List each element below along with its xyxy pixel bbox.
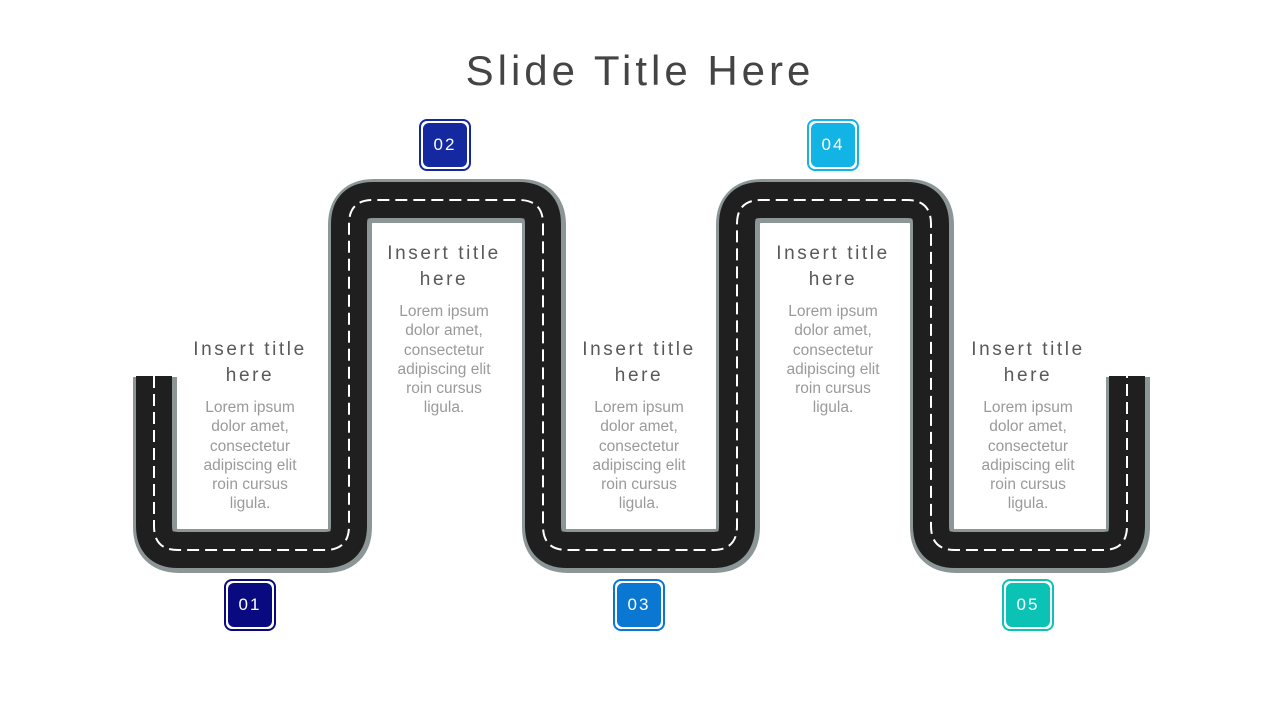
badge 05: 05 [1017, 595, 1039, 614]
text block 1: here [226, 365, 274, 386]
text block 4: ligula. [813, 399, 853, 416]
badge 02: 02 [434, 135, 456, 154]
text block 1: dolor amet, [211, 418, 289, 435]
text block 3 [582, 339, 696, 512]
text block 5: dolor amet, [989, 418, 1067, 435]
text block 4 [776, 243, 890, 416]
text block 1 [193, 339, 307, 512]
text block 2: Insert title [387, 243, 501, 264]
text block 2: roin cursus [406, 380, 482, 397]
text block 5: adipiscing elit [981, 457, 1075, 474]
text block 5: Lorem ipsum [983, 399, 1073, 416]
text block 2: here [420, 269, 468, 290]
badge 02 [419, 119, 471, 171]
text block 4: Insert title [776, 243, 890, 264]
text block 2: consectetur [404, 342, 484, 359]
text block 4: adipiscing elit [786, 361, 880, 378]
text block 4: Lorem ipsum [788, 303, 878, 320]
text block 3: Insert title [582, 339, 696, 360]
text block 1: roin cursus [212, 476, 288, 493]
text block 2: ligula. [424, 399, 464, 416]
text block 5 [971, 339, 1085, 512]
badge 03 [613, 579, 665, 631]
text block 5: Insert title [971, 339, 1085, 360]
text block 3: adipiscing elit [592, 457, 686, 474]
text block 1: consectetur [210, 438, 290, 455]
badge 04: 04 [822, 135, 844, 154]
text block 1: Insert title [193, 339, 307, 360]
text block 5: ligula. [1008, 495, 1048, 512]
text block 3: roin cursus [601, 476, 677, 493]
badge 04 [807, 119, 859, 171]
title: Slide Title Here [466, 47, 814, 94]
badge 05 [1002, 579, 1054, 631]
text block 3: here [615, 365, 663, 386]
text block 2: Lorem ipsum [399, 303, 489, 320]
badge 03: 03 [628, 595, 650, 614]
text block 4: here [809, 269, 857, 290]
text block 3: ligula. [619, 495, 659, 512]
badge 01 [224, 579, 276, 631]
text block 5: roin cursus [990, 476, 1066, 493]
text block 2: adipiscing elit [397, 361, 491, 378]
text block 1: Lorem ipsum [205, 399, 295, 416]
badge 01: 01 [239, 595, 261, 614]
text block 5: here [1004, 365, 1052, 386]
text block 1: adipiscing elit [203, 457, 297, 474]
text block 2 [387, 243, 501, 416]
text block 2: dolor amet, [405, 322, 483, 339]
text block 4: consectetur [793, 342, 873, 359]
text block 1: ligula. [230, 495, 270, 512]
text block 5: consectetur [988, 438, 1068, 455]
text block 3: dolor amet, [600, 418, 678, 435]
text block 3: Lorem ipsum [594, 399, 684, 416]
text block 4: roin cursus [795, 380, 871, 397]
text block 4: dolor amet, [794, 322, 872, 339]
text block 3: consectetur [599, 438, 679, 455]
